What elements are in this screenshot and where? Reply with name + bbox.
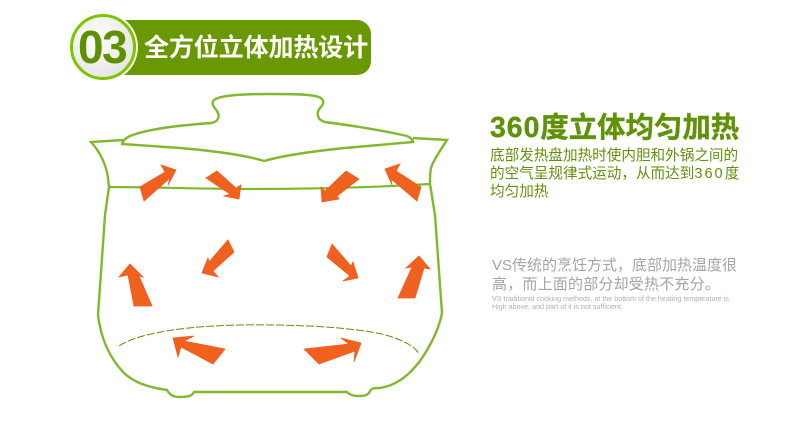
pot rim line xyxy=(109,184,430,189)
heat arrows xyxy=(119,164,430,364)
english note: VS traditional cooking methods, at the bottom of the heating temperature is xyxy=(492,295,729,303)
description text: 的空气呈规律式运动，从而达到360度 xyxy=(490,166,739,182)
arrow top 4 xyxy=(385,164,421,201)
arrow top 1 xyxy=(140,165,176,201)
arrow bottom right xyxy=(304,338,361,364)
pot body xyxy=(91,138,447,397)
number circle xyxy=(70,14,136,80)
english note: High above, and part of it is not sufficient. xyxy=(492,303,623,311)
inner pot dashed line xyxy=(119,325,419,354)
english note xyxy=(492,295,729,311)
description text xyxy=(490,147,739,200)
arrow right side xyxy=(398,256,430,298)
comparison text: 高，而上面的部分却受热不充分。 xyxy=(492,276,720,293)
arrow top 3 xyxy=(321,171,359,202)
arrow top 2 xyxy=(206,171,241,199)
arrow left side xyxy=(119,264,152,306)
comparison text xyxy=(492,257,737,293)
section title: 全方位立体加热设计 xyxy=(144,34,368,62)
main heading: 360度立体均匀加热 xyxy=(490,112,739,144)
arrow middle right xyxy=(327,244,358,281)
description text: 底部发热盘加热时使内胆和外锅之间的 xyxy=(490,148,738,164)
header badge xyxy=(70,14,371,80)
description text: 均匀加热 xyxy=(490,184,548,200)
header bar xyxy=(119,20,371,75)
pot lid xyxy=(122,94,413,161)
arrow middle left xyxy=(202,240,234,277)
comparison text: VS传统的烹饪方式，底部加热温度很 xyxy=(492,257,737,274)
number 03: 03 xyxy=(78,21,126,73)
arrow bottom left xyxy=(173,336,225,364)
